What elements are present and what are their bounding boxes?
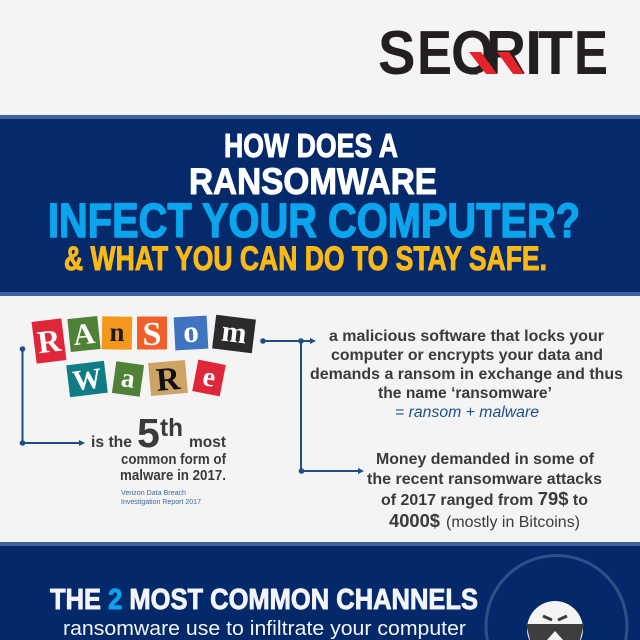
ransomware letter tiles: o bbox=[182, 314, 200, 349]
logo: Seqrite: R bbox=[486, 19, 526, 88]
text: ransomware definition: demands a ransom in exchange and thus bbox=[310, 366, 623, 383]
heading: how does a: HOW DOES A bbox=[224, 127, 398, 164]
text: ransom amounts: (mostly in Bitcoins) bbox=[446, 514, 580, 531]
text: ransomware definition: the name ‘ransomware’ bbox=[378, 385, 552, 402]
ransomware letter tiles: W bbox=[71, 362, 103, 398]
text: ransom amounts bbox=[367, 451, 602, 531]
logo: Seqrite: S bbox=[378, 19, 416, 88]
ransomware letter tiles: S bbox=[143, 316, 161, 353]
ransomware letter tiles: A bbox=[72, 317, 97, 352]
ransomware letter tiles: R bbox=[155, 361, 183, 399]
ransomware letter tiles: e bbox=[200, 361, 218, 394]
logo: Seqrite: T bbox=[538, 19, 573, 88]
text: ransom amounts: the recent ransomware attacks bbox=[367, 471, 602, 488]
logo: Seqrite: E bbox=[417, 19, 452, 88]
text: ransomware definition: = ransom + malware bbox=[395, 404, 539, 421]
logo: Seqrite bbox=[378, 19, 608, 90]
ransomware letter tiles: n bbox=[109, 317, 125, 347]
text: 5th most common form of malware: th bbox=[160, 414, 183, 442]
panel: two most common channels bbox=[0, 542, 640, 640]
logo: Seqrite: I bbox=[525, 19, 542, 88]
ransomware letter tiles: a bbox=[119, 362, 137, 394]
text: ransomware definition: computer or encrypts your data and bbox=[331, 347, 603, 364]
text: ransom amounts: of 2017 ranged from 79$ to bbox=[381, 489, 588, 509]
text: ransom amounts: Money demanded in some of bbox=[376, 451, 595, 468]
ransomware letter tiles bbox=[32, 313, 256, 400]
text: 5th most common form of malware: malware in 2017. bbox=[120, 468, 226, 484]
ransomware letter tiles: R bbox=[35, 322, 64, 360]
logo: Seqrite: Q bbox=[451, 19, 494, 88]
source note: Verizon Data Breach bbox=[121, 488, 186, 497]
logo: Seqrite: E bbox=[574, 19, 608, 88]
text: 5th most common form of malware: is the bbox=[91, 434, 132, 451]
subheading: infiltrate your computer: ransomware use to infiltrate your computer bbox=[63, 618, 466, 640]
arrow: tiles to definition and ransom amount bbox=[260, 338, 364, 474]
text: 5th most common form of malware: 5 bbox=[137, 410, 160, 456]
text: 5th most common form of malware: most bbox=[189, 434, 226, 451]
icon: masked hacker in circle bbox=[486, 556, 627, 640]
text: 5th most common form of malware bbox=[91, 410, 226, 484]
text: ransomware definition bbox=[310, 328, 623, 421]
panel: title banner bbox=[0, 115, 640, 296]
heading: the 2 most common channels: THE 2 MOST COMMON CHANNELS bbox=[50, 584, 478, 616]
arrow: tiles to 5th most common bbox=[20, 346, 85, 446]
source note: Investigation Report 2017 bbox=[121, 497, 201, 506]
heading: ransomware: RANSOMWARE bbox=[189, 161, 437, 202]
ransomware letter tiles: m bbox=[220, 315, 249, 350]
text: ransom amounts: 4000$ bbox=[389, 511, 440, 531]
text: ransomware definition: a malicious software that locks your bbox=[329, 328, 604, 345]
text: 5th most common form of malware: common form of bbox=[121, 452, 226, 468]
source note bbox=[121, 488, 201, 506]
